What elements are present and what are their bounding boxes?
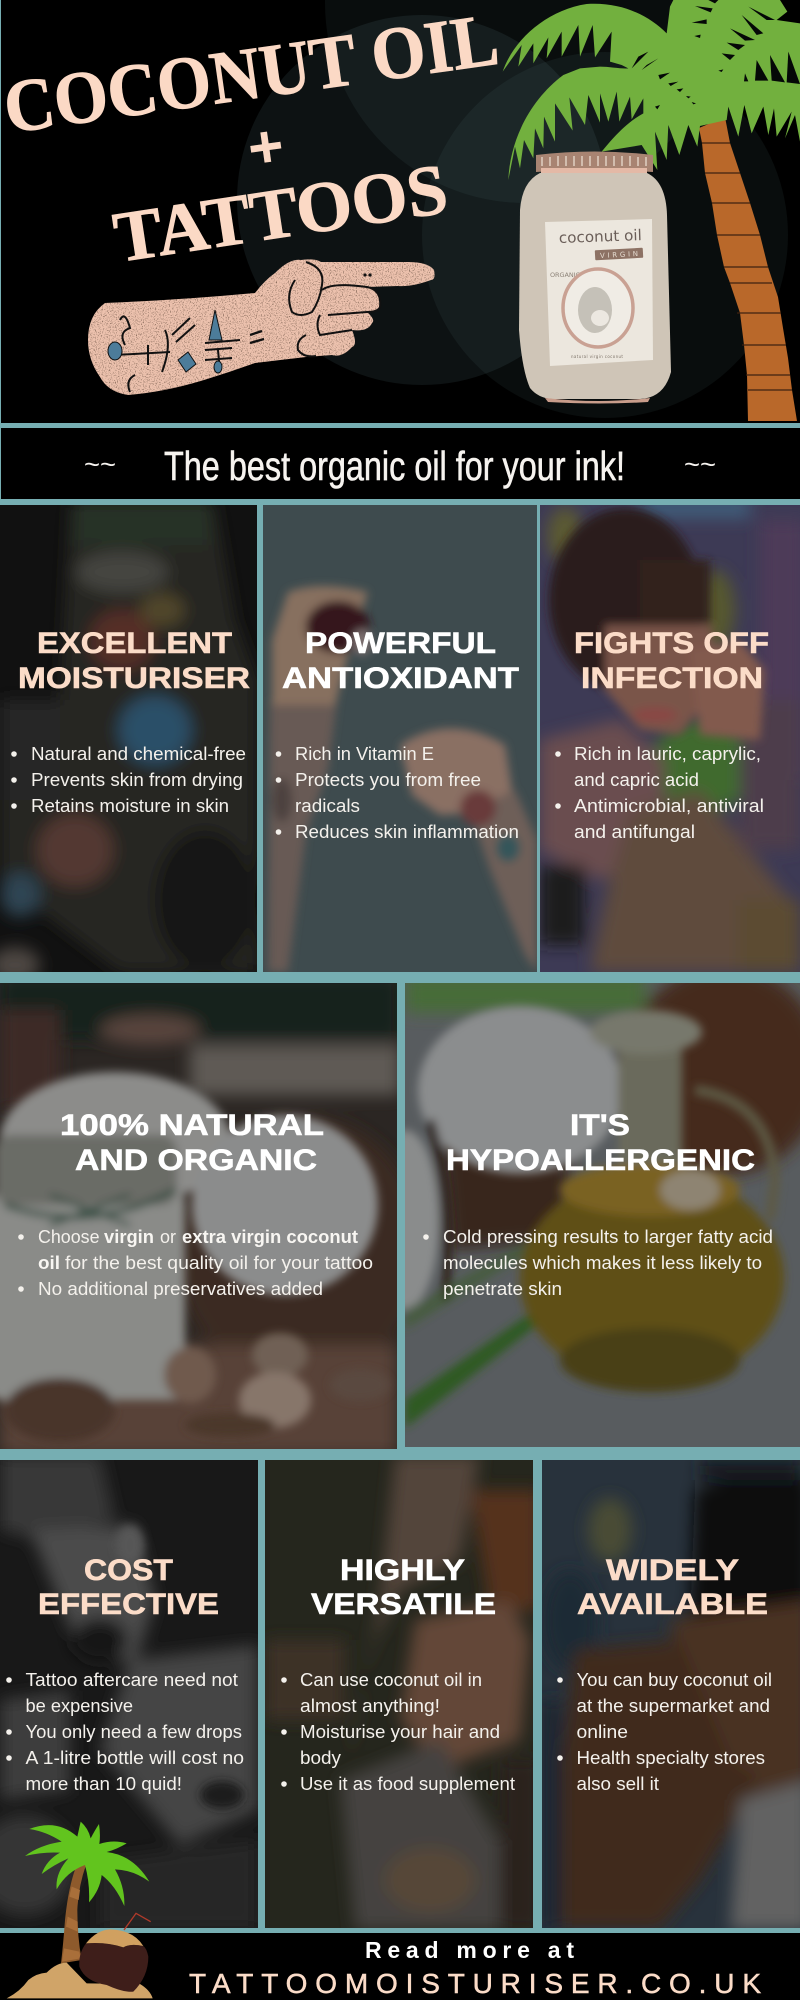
bullet list: oil xyxy=(38,1253,60,1273)
bullet list: No additional preservatives added xyxy=(38,1279,323,1299)
bullet list xyxy=(557,1670,772,1794)
title xyxy=(0,0,503,278)
panel: cost effective xyxy=(0,1455,258,1930)
icon: tattooed pointing hand xyxy=(88,259,435,395)
heading: HYPOALLERGENIC xyxy=(446,1144,755,1177)
heading xyxy=(38,1554,219,1621)
bullet list: more than 10 quid! xyxy=(26,1774,182,1794)
bullet list: Health specialty stores xyxy=(576,1748,765,1768)
photo: tattooed woman profile xyxy=(265,1455,540,1930)
bullet list: Reduces skin inflammation xyxy=(295,822,519,842)
bullet list: molecules which makes it less likely to xyxy=(443,1253,762,1273)
bullet list xyxy=(11,744,246,816)
bullet list: almost anything! xyxy=(300,1696,440,1716)
heading xyxy=(446,1109,755,1177)
bullet list xyxy=(276,744,519,842)
photo: coconuts and jar xyxy=(0,975,425,1455)
heading xyxy=(574,627,769,695)
bullet list: You can buy coconut oil xyxy=(576,1670,772,1690)
bullet list: Prevents skin from drying xyxy=(31,770,243,790)
jar label: VIRGIN xyxy=(600,250,638,260)
tagline text: ~~ xyxy=(684,449,716,479)
heading xyxy=(577,1554,768,1621)
bullet list: for the best quality oil for your tattoo xyxy=(65,1253,373,1273)
bullet list: extra virgin coconut xyxy=(182,1227,358,1247)
photo: black and white couple xyxy=(0,1455,258,1930)
panel: header xyxy=(0,0,800,423)
panel: 100% natural and organic xyxy=(0,975,425,1455)
bullet list: radicals xyxy=(295,796,360,816)
heading: AND ORGANIC xyxy=(75,1144,317,1177)
bullet list: at the supermarket and xyxy=(576,1696,770,1716)
heading: 100% NATURAL xyxy=(60,1109,324,1142)
icon: coconut oil jar xyxy=(519,152,671,404)
heading: EXCELLENT xyxy=(37,627,232,660)
footer text: TATTOOMOISTURISER.CO.UK xyxy=(189,1968,761,1999)
heading: INFECTION xyxy=(581,662,763,695)
heading: VERSATILE xyxy=(311,1588,496,1621)
heading xyxy=(60,1109,324,1177)
photo: tattooed body xyxy=(0,500,257,983)
bullet list: and capric acid xyxy=(574,770,699,790)
footer text xyxy=(189,1937,761,1999)
photo: hands holding apple xyxy=(263,505,537,972)
bullet list: You only need a few drops xyxy=(26,1722,242,1742)
icon: small palm tree with coconut drink xyxy=(7,1822,153,1998)
bullet list: Cold pressing results to larger fatty acid xyxy=(443,1227,773,1247)
bullet list: online xyxy=(576,1722,628,1742)
panel: powerful antioxidant xyxy=(263,505,537,972)
bullet list: Moisturise your hair and xyxy=(300,1722,500,1742)
jar label: ORGANIC xyxy=(550,271,580,279)
heading: WIDELY xyxy=(606,1554,739,1587)
jar label: natural virgin coconut xyxy=(571,354,623,359)
tagline text: The best organic oil for your ink! xyxy=(164,443,625,489)
bullet list: Retains moisture in skin xyxy=(31,796,229,816)
bullet list: Antimicrobial, antiviral xyxy=(574,796,764,816)
heading: COST xyxy=(84,1554,173,1587)
bullet list: Use it as food supplement xyxy=(300,1774,515,1794)
panel: excellent moisturiser xyxy=(0,500,257,983)
bullet list: Rich in Vitamin E xyxy=(295,744,434,764)
heading xyxy=(18,627,250,695)
bullet list: be expensive xyxy=(26,1696,133,1716)
panel: widely available xyxy=(542,1460,800,1930)
bullet list: Tattoo aftercare need not xyxy=(26,1670,238,1690)
bullet list: A 1-litre bottle will cost no xyxy=(26,1748,244,1768)
photo: tattooed woman xyxy=(540,498,800,972)
bullet list: virgin xyxy=(104,1227,154,1247)
title: TATTOOS xyxy=(108,148,453,278)
photo: coconut oil bottle xyxy=(405,983,800,1447)
bullet list: Choose xyxy=(38,1227,100,1247)
panel: hypoallergenic xyxy=(405,983,800,1447)
bullet list xyxy=(18,1227,373,1299)
icon: palm tree xyxy=(503,0,800,421)
tagline text: ~~ xyxy=(84,449,116,479)
heading: EFFECTIVE xyxy=(38,1588,219,1621)
title: + xyxy=(244,112,287,182)
heading: MOISTURISER xyxy=(18,662,250,695)
heading: IT'S xyxy=(570,1109,630,1142)
footer text: Read more at xyxy=(365,1937,574,1963)
panel: footer xyxy=(0,1933,800,2000)
jar label xyxy=(545,219,653,366)
heading: FIGHTS OFF xyxy=(574,627,769,660)
heading xyxy=(311,1554,496,1621)
photo: tattooed man hand to face xyxy=(542,1460,800,1930)
bullet list: or xyxy=(160,1227,176,1247)
bullet list: penetrate skin xyxy=(443,1279,562,1299)
bullet list: Natural and chemical-free xyxy=(31,744,246,764)
heading: ANTIOXIDANT xyxy=(282,662,519,695)
bullet list xyxy=(555,744,764,842)
heading: POWERFUL xyxy=(305,627,496,660)
bullet list: body xyxy=(300,1748,341,1768)
panel: tagline xyxy=(1,428,800,499)
background circles xyxy=(237,0,788,418)
panel: highly versatile xyxy=(265,1455,540,1930)
bullet list xyxy=(281,1670,515,1794)
bullet list: Can use coconut oil in xyxy=(300,1670,482,1690)
bullet list: Rich in lauric, caprylic, xyxy=(574,744,761,764)
heading: HIGHLY xyxy=(340,1554,465,1587)
bullet list: Protects you from free xyxy=(295,770,481,790)
panel: fights off infection xyxy=(540,498,800,972)
heading xyxy=(282,627,519,695)
bullet list xyxy=(6,1670,244,1794)
heading: AVAILABLE xyxy=(577,1588,768,1621)
bullet list: also sell it xyxy=(576,1774,659,1794)
jar label: coconut oil xyxy=(559,226,642,247)
bullet list: and antifungal xyxy=(574,822,695,842)
bullet list xyxy=(423,1227,773,1299)
